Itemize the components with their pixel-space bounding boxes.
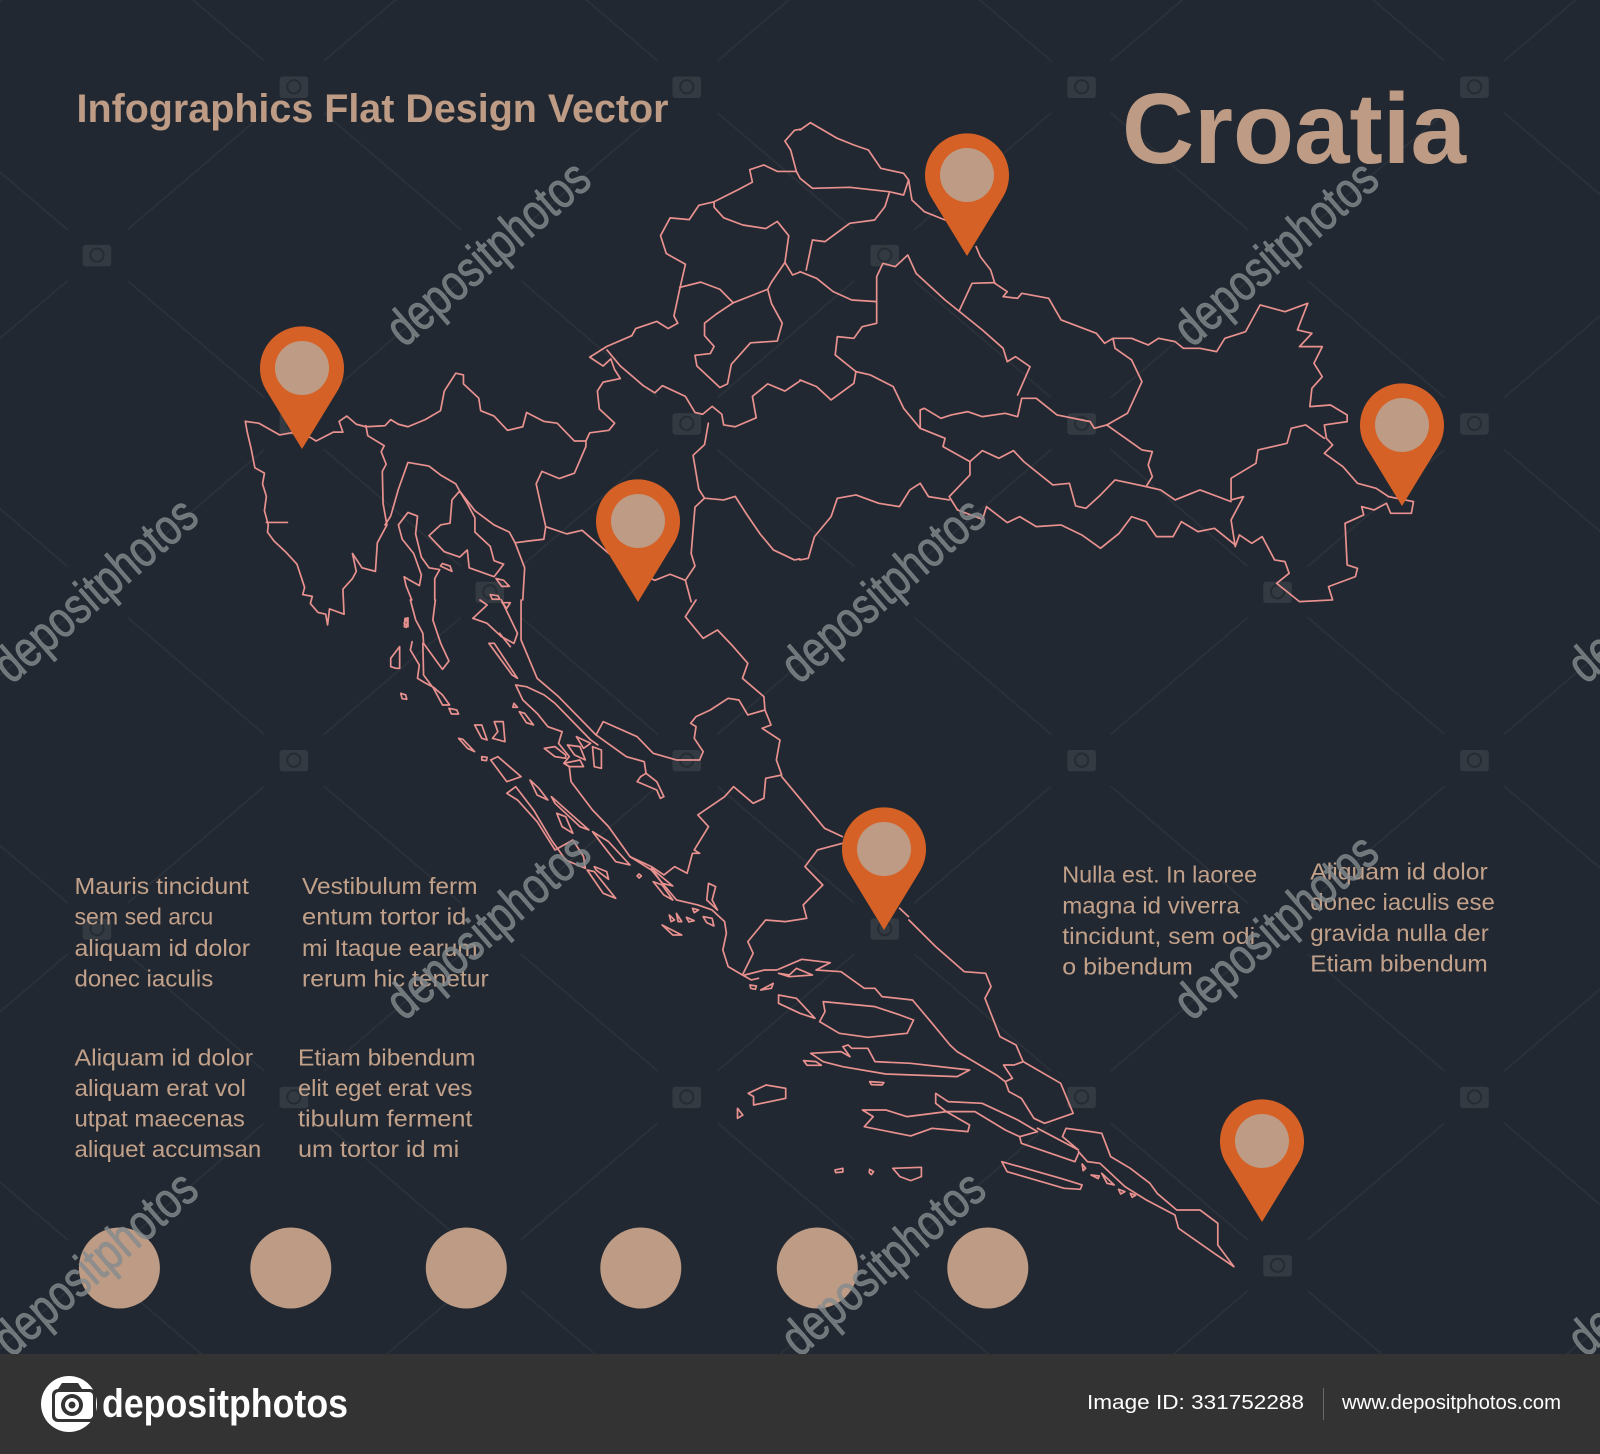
text block: Vestibulum ferm: rerum hic tenetur (302, 966, 489, 992)
row of six circles (79, 1228, 1028, 1308)
text block: Etiam bibendum: elit eget erat ves (298, 1075, 472, 1101)
title: Croatia: Croatia (1122, 73, 1467, 185)
text block: Vestibulum ferm: entum tortor id (302, 903, 466, 929)
text block: Nulla est: tincidunt, sem odi (1062, 923, 1255, 949)
text block: Aliquam donec: gravida nulla der (1310, 920, 1489, 946)
pin: north-east Koprivnica (925, 133, 1009, 256)
text block: Mauris tincidunt: sem sed arcu (74, 903, 213, 929)
text block: Nulla est: magna id viverra (1062, 892, 1240, 918)
watermark text overlay: depositphotos (374, 822, 601, 1030)
map section: Lika, Zadar and northern islands (391, 600, 909, 980)
pin: east Slavonia (1360, 383, 1444, 506)
text block: Mauris tincidunt: Mauris tincidunt (74, 873, 250, 899)
text block: Nulla est (1062, 862, 1257, 979)
watermark text overlay: depositphotos (1162, 822, 1389, 1030)
pin: Istria (260, 326, 344, 449)
text block: Aliquam donec: donec iaculis ese (1310, 889, 1495, 915)
text block: Etiam bibendum: um tortor id mi (298, 1136, 459, 1162)
text block: Aliquam id dolor: aliquet accumsan (74, 1136, 261, 1162)
text block: Aliquam id dolor: Aliquam id dolor (74, 1044, 253, 1070)
text block: Vestibulum ferm: Vestibulum ferm (302, 873, 478, 899)
text block: Mauris tincidunt: donec iaculis (74, 966, 213, 992)
pin: Dalmatia (842, 807, 926, 930)
text block: Mauris tincidunt: aliquam id dolor (74, 935, 250, 961)
text block: Aliquam donec: Aliquam id dolor (1310, 859, 1488, 885)
text block: Aliquam id dolor: aliquam erat vol (74, 1075, 246, 1101)
text block: Aliquam donec (1310, 859, 1495, 976)
map: Croatia county outlines (245, 123, 1413, 1267)
text block: Aliquam donec: Etiam bibendum (1310, 950, 1488, 976)
footer bar (0, 1354, 1600, 1454)
pin: Lika (596, 479, 680, 602)
text block: Nulla est: o bibendum (1062, 953, 1193, 979)
footer image id: Image ID: 331752288 (1087, 1392, 1304, 1414)
watermark text overlay: depositphotos (374, 149, 601, 357)
text block: Etiam bibendum: Etiam bibendum (298, 1044, 476, 1070)
text block: Aliquam id dolor (74, 1044, 261, 1162)
watermark text overlay: depositphotos (769, 1159, 996, 1367)
text block: Aliquam id dolor: utpat maecenas (74, 1106, 245, 1132)
text block: Nulla est: Nulla est. In laoree (1062, 862, 1257, 888)
footer website: www.depositphotos.com (1341, 1392, 1561, 1414)
map section: Istria and north-west counties (245, 129, 800, 627)
text block: Vestibulum ferm: mi Itaque earum (302, 935, 478, 961)
text block: Vestibulum ferm (302, 873, 489, 992)
map section: Dalmatia and southern islands (737, 920, 1234, 1267)
text block: Etiam bibendum: tibulum ferment (298, 1106, 473, 1132)
watermark text overlay: depositphotos (769, 486, 996, 693)
pin: south (1220, 1099, 1304, 1222)
text block: Mauris tincidunt (74, 873, 250, 992)
heading: infographics subtitle: Infographics Flat Design Vector (76, 87, 668, 131)
icon: footer camera logo (41, 1376, 97, 1432)
map section: north and east counties (800, 123, 1413, 602)
text block: Etiam bibendum (298, 1044, 476, 1162)
watermark text overlay: depositphotos (1162, 149, 1389, 357)
footer logo wordmark: depositphotos (102, 1382, 348, 1426)
